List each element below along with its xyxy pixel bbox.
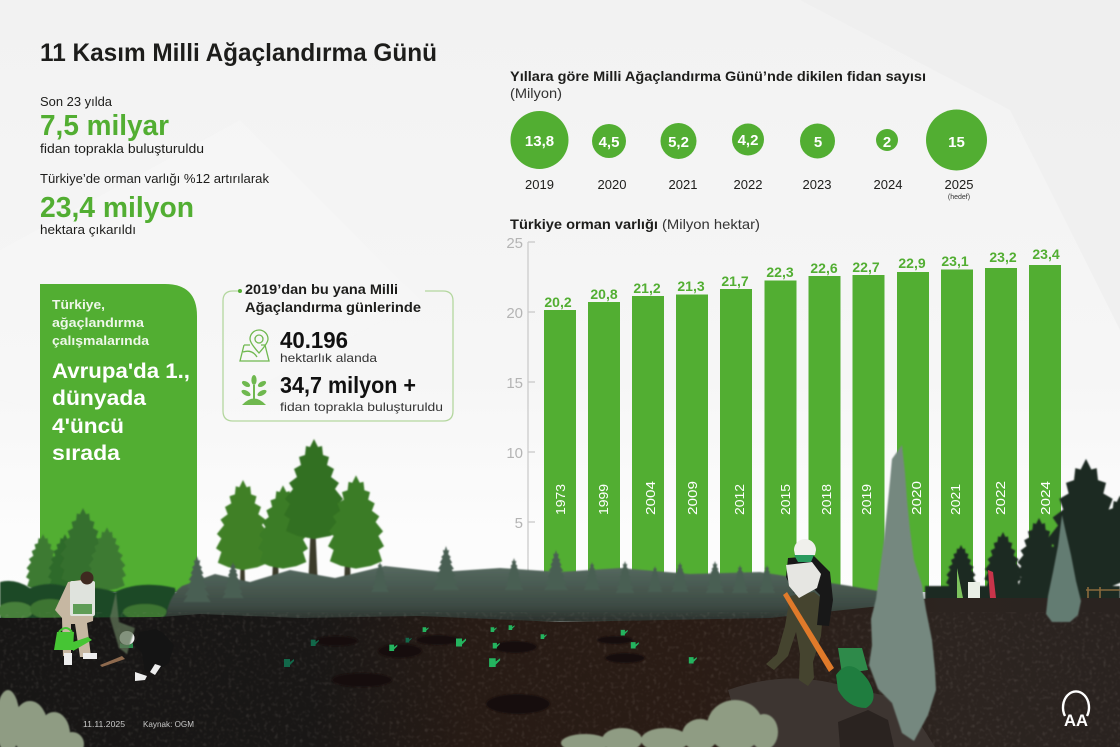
bar values: 22,6	[810, 260, 838, 276]
bubble chart: saplings per year: 2020	[598, 177, 626, 192]
heading: saplings per year	[510, 69, 926, 101]
bubble chart: saplings per year: 2021	[669, 177, 697, 192]
panel intro text: ağaçlandırma	[52, 315, 145, 330]
panel: since 2019	[223, 281, 453, 421]
mound at right	[728, 678, 935, 747]
bar values: 23,1	[941, 253, 969, 269]
bar values: 21,7	[721, 273, 749, 289]
logo: AA: AA	[1064, 711, 1088, 730]
bar values: 22,7	[852, 259, 880, 275]
bubble chart: saplings per year: 4,5	[599, 134, 619, 151]
bubble chart: saplings per year: 2019	[525, 177, 554, 192]
y axis: 5	[515, 515, 523, 532]
bar years: 1973	[553, 484, 568, 515]
bar values: 22,3	[766, 264, 794, 280]
bar years: 2004	[643, 481, 658, 515]
landscape illustration	[0, 439, 1120, 747]
soil texture	[0, 612, 1120, 747]
panel intro text: Türkiye,	[52, 297, 105, 312]
trees on green panel	[26, 508, 126, 591]
heading: saplings per year: Yıllara göre Milli Ağaçlandırma Günü’nde dikilen fidan sayısı	[510, 69, 926, 84]
flags	[957, 568, 1120, 605]
text: hektarlik alanda: hektarlık alanda	[280, 351, 377, 365]
panel heading: 2019’dan bu yana Milli	[245, 281, 398, 297]
heading: forest area: (Milyon hektar)	[662, 216, 760, 232]
icon: map pin	[240, 330, 269, 361]
bubble chart: saplings per year: 2023	[803, 177, 831, 192]
bubble chart: saplings per year: 5	[814, 134, 822, 151]
bar years: 2022	[993, 481, 1008, 515]
footer: date and source: Kaynak: OGM	[143, 719, 194, 729]
icon: seedling	[240, 375, 268, 405]
stats block: saplings and forest	[40, 94, 269, 237]
cypress large	[869, 445, 936, 741]
small watering cans	[284, 625, 697, 667]
stat: 40.196: 40.196	[280, 327, 348, 353]
stat: 23,4 milyon: 23,4 milyon	[40, 192, 194, 224]
panel ranking text: Avrupa'da 1.,	[52, 360, 190, 383]
bar values: 21,2	[633, 280, 661, 296]
bubble chart: saplings per year	[510, 110, 987, 201]
y axis: 25	[506, 235, 523, 252]
bubble chart: saplings per year: 2022	[734, 177, 762, 192]
panel heading: Ağaçlandırma günlerinde	[245, 299, 421, 315]
y axis: 10	[506, 445, 523, 462]
left bushes	[0, 581, 180, 625]
bar years: 2015	[778, 484, 793, 515]
logo: AA	[1063, 691, 1089, 730]
y axis	[506, 235, 535, 592]
stat: 34,7 milyon: 34,7 milyon +	[280, 372, 416, 398]
bar years: 1999	[596, 484, 611, 515]
bar values: 23,4	[1032, 246, 1060, 262]
bubble chart: saplings per year: 2025	[945, 177, 973, 192]
cypress small	[1046, 515, 1081, 622]
panel: ranking	[40, 284, 197, 592]
bubble chart: saplings per year: 13,8	[525, 133, 554, 150]
y axis: 15	[506, 375, 523, 392]
bar years: 2012	[732, 484, 747, 515]
bar years: 2020	[909, 481, 924, 515]
text: fidan toprakla: fidan toprakla buluşturuldu	[280, 400, 443, 414]
text: fidan toprakla: fidan toprakla buluşturuldu	[40, 141, 204, 156]
panel intro text: çalışmalarında	[52, 333, 150, 348]
sapling	[110, 592, 135, 654]
bubble chart: saplings per year: 5,2	[668, 134, 689, 151]
bar years: 2019	[859, 484, 874, 515]
bar values: 20,2	[544, 294, 572, 310]
y axis: 20	[506, 305, 523, 322]
bar values: 21,3	[677, 278, 705, 294]
ground	[0, 598, 1120, 747]
bar years: 2024	[1038, 481, 1053, 515]
panel ranking text: 4'üncü	[52, 415, 124, 438]
foreground shrub left	[0, 690, 84, 747]
bars	[544, 265, 1061, 592]
bubble chart: saplings per year: (hedef)	[948, 194, 970, 201]
bubble chart: saplings per year: 2024	[874, 177, 902, 192]
heading: saplings per year: (Milyon)	[510, 86, 562, 101]
heading: forest area	[510, 216, 760, 232]
bar values: 20,8	[590, 286, 618, 302]
panel heading	[245, 281, 421, 315]
bar years: 2018	[819, 484, 834, 515]
footer: date and source	[83, 719, 194, 729]
text: son 23 yilda: Son 23 yılda	[40, 94, 113, 109]
stat: 7,5 milyar: 7,5 milyar	[40, 110, 169, 142]
footer: date and source: 11.11.2025	[83, 719, 125, 729]
bubble chart: saplings per year: 4,2	[738, 132, 758, 149]
bar values: 22,9	[898, 255, 926, 271]
bubble chart: saplings per year: 2	[883, 134, 891, 151]
text: hektara cikarildi: hektara çıkarıldı	[40, 222, 136, 237]
blue-green conifer row	[165, 546, 930, 622]
soil mounds	[314, 635, 645, 714]
bar years: 2009	[685, 481, 700, 515]
gardener with shovel	[766, 539, 874, 708]
heading: forest area: Türkiye orman varlığı	[510, 216, 658, 232]
panel intro text	[52, 297, 150, 348]
panel ranking text: dünyada	[52, 387, 146, 410]
bubble chart: saplings per year: 15	[948, 134, 965, 151]
bar values	[544, 246, 1060, 310]
tall green trees	[216, 439, 384, 592]
text: orman varligi: Türkiye’de orman varlığı %12 artırılarak	[40, 171, 269, 186]
panel ranking text: sırada	[52, 442, 120, 465]
bar values: 23,2	[989, 249, 1017, 265]
bar years: 2021	[948, 484, 963, 515]
bar chart: forest area	[506, 235, 1061, 592]
foreground shrub right	[561, 700, 778, 747]
dark trees at right	[925, 459, 1120, 600]
person with watering can	[54, 572, 97, 665]
title: 11 Kasım Milli Ağaçlandırma Günü	[40, 39, 437, 67]
bar years	[553, 481, 1053, 515]
person crouching	[100, 629, 174, 681]
panel ranking text	[52, 360, 190, 465]
